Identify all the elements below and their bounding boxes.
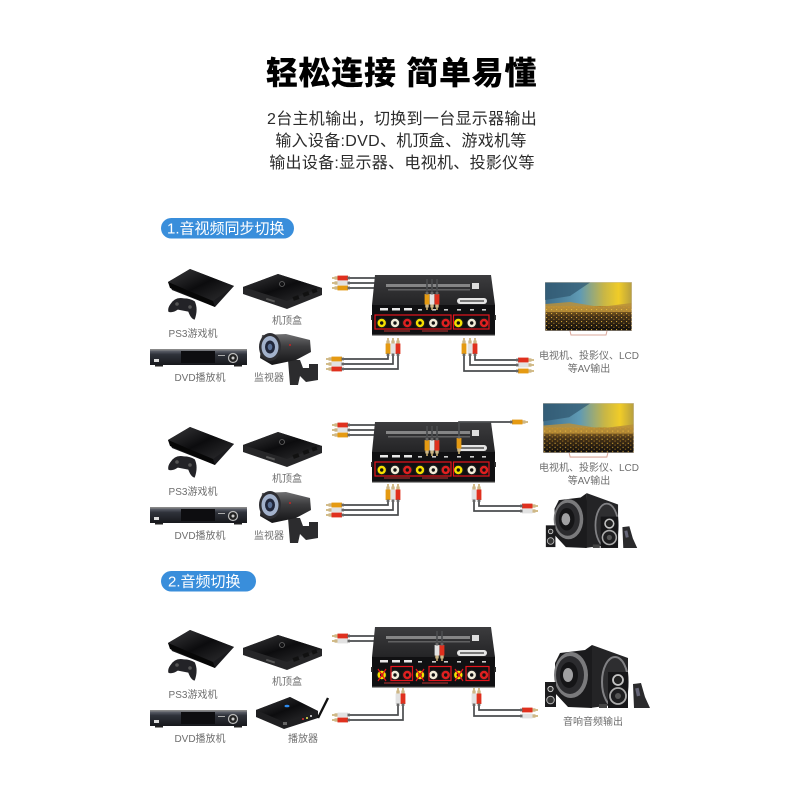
icon: television [545,282,632,335]
label: DVD: DVD播放机 [174,732,226,745]
icon: set-top box [243,274,322,309]
output cables [472,688,538,718]
subtitle text block: 输入设备:DVD、机顶盒、游戏机等 [275,132,527,150]
panel: AV diagram with TV output [150,269,639,385]
label: TV output: 电视机、投影仪、LCD [539,349,639,362]
highlight: port boxes [375,315,489,329]
icon: set-top box [243,635,322,670]
icon: PS3 console [168,427,234,478]
icon: PS3 console [168,630,234,681]
label: AV output: 等AV输出 [568,362,610,375]
output cables [462,338,534,373]
icon: set-top box [243,432,322,467]
input cables bottom [326,484,400,517]
label: set-top box: 机顶盒 [272,675,302,688]
icon: PS3 console [168,269,234,320]
label: AV output: 等AV输出 [568,474,610,487]
panel: AV diagram with TV and speaker output [150,403,639,548]
icon: DVD player [150,349,247,366]
label: camera: 监视器 [254,371,284,384]
section heading: 2 audio switching [161,571,256,592]
label: DVD: DVD播放机 [174,529,226,542]
label: set-top box: 机顶盒 [272,314,302,327]
label: PS3: PS3游戏机 [169,688,217,701]
icon: security camera [259,491,318,543]
icon: security camera [259,333,318,385]
plugs into device top [425,279,439,310]
switcher device [371,422,496,482]
plugs into device top [425,420,528,456]
subtitle text block [267,110,537,172]
icon: television [543,403,634,457]
label: TV output: 电视机、投影仪、LCD [539,461,639,474]
panel: audio diagram [150,627,650,745]
switcher device [371,627,496,688]
highlight: port boxes [375,462,489,476]
icon: speakers [545,645,650,708]
section heading: 1 audio-video sync switching: 1.音视频同步切换 [167,220,285,238]
subtitle text block: 输出设备:显示器、电视机、投影仪等 [269,154,535,172]
input cables top [332,276,437,294]
label: set-top box: 机顶盒 [272,472,302,485]
input cables top [332,423,437,440]
section heading: 2 audio switching: 2.音频切换 [168,574,241,590]
label: speaker output: 音响音频输出 [563,715,623,728]
output cables [472,484,538,513]
icon: DVD player [150,710,247,728]
label: DVD: DVD播放机 [174,371,226,384]
icon: DVD player [150,507,247,524]
subtitle text block: 2台主机输出，切换到一台显示器输出 [267,110,537,128]
label: media player: 播放器 [288,732,318,745]
icon: speakers [546,493,637,548]
label: PS3: PS3游戏机 [169,327,217,340]
plugs into device top [435,631,444,661]
input cables bottom [326,338,400,371]
title: 轻松连接 简单易懂 [266,55,537,91]
label: PS3: PS3游戏机 [169,485,217,498]
input cables bottom [332,688,405,722]
switcher device [371,275,496,336]
label: camera: 监视器 [254,529,284,542]
highlight: audio port boxes and crossed-out video ports [378,666,489,681]
input cables top [332,634,442,646]
icon: media player [256,697,328,729]
